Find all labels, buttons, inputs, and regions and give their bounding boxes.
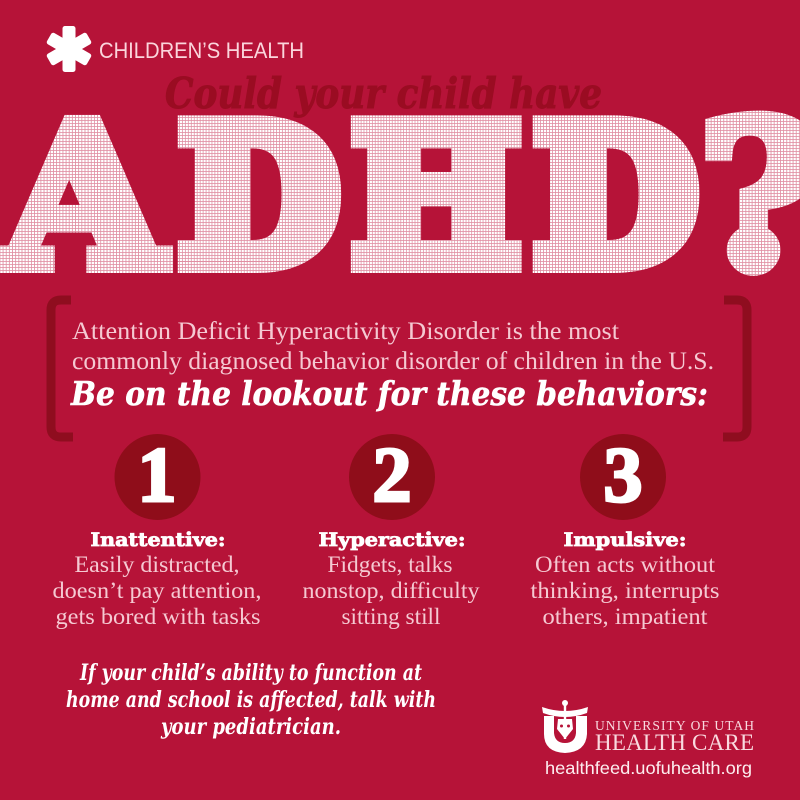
closing note: your pediatrician. bbox=[160, 714, 341, 740]
lookout heading: Be on the lookout for these behaviors: bbox=[70, 374, 708, 413]
title: ADHD? with dotted texture: A bbox=[1, 83, 165, 312]
hyperactive description: Fidgets, talks bbox=[328, 552, 452, 578]
impulsive heading: Impulsive: bbox=[564, 529, 686, 551]
wordmark: UNIVERSITY OF UTAH bbox=[595, 718, 754, 733]
impulsive description bbox=[530, 552, 720, 630]
number badge 2: 2 bbox=[372, 431, 412, 518]
number badge 3: 3 bbox=[604, 431, 642, 518]
intro text block: Attention Deficit Hyperactivity Disorder is the most bbox=[72, 318, 619, 345]
inattentive description bbox=[52, 552, 262, 630]
intro text block: commonly diagnosed behavior disorder of children in the U.S. bbox=[72, 348, 714, 375]
number badge 3 bbox=[580, 431, 666, 520]
number badge 1 bbox=[114, 431, 200, 520]
brand header: children's health bbox=[46, 26, 304, 72]
title: ADHD? with dotted texture: H bbox=[353, 87, 519, 306]
website url: healthfeed.uofuhealth.org bbox=[545, 758, 752, 778]
right bracket bbox=[723, 300, 747, 437]
hyperactive heading: Hyperactive: bbox=[318, 529, 466, 551]
number badge 1: 1 bbox=[138, 431, 176, 518]
title: ADHD? with dotted texture bbox=[1, 79, 800, 314]
panel: impulsive bbox=[530, 431, 720, 630]
header label: CHILDREN’S HEALTH bbox=[99, 38, 304, 63]
impulsive description: others, impatient bbox=[542, 604, 708, 630]
closing note: If your child’s ability to function at bbox=[79, 660, 422, 686]
title: ADHD? with dotted texture: D bbox=[535, 87, 696, 306]
subtitle: could your child have: Could your child have bbox=[165, 69, 602, 118]
hyperactive description: sitting still bbox=[342, 604, 441, 630]
title: ADHD? with dotted texture: D bbox=[180, 88, 338, 306]
hyperactive description bbox=[302, 552, 480, 630]
closing note: home and school is affected, talk with bbox=[66, 687, 436, 713]
left bracket bbox=[51, 300, 73, 437]
impulsive description: Often acts without bbox=[535, 552, 715, 578]
panel: inattentive bbox=[52, 431, 262, 630]
icon: U with caduceus bbox=[542, 700, 588, 753]
hyperactive description: nonstop, difficulty bbox=[302, 578, 480, 604]
closing note bbox=[66, 660, 436, 740]
inattentive description: Easily distracted, bbox=[74, 552, 240, 578]
impulsive description: thinking, interrupts bbox=[530, 578, 720, 604]
icon: asterisk bbox=[46, 26, 92, 72]
inattentive heading: Inattentive: bbox=[90, 529, 226, 551]
logo: university of utah health care: HEALTH CARE bbox=[595, 730, 754, 755]
logo: university of utah health care bbox=[542, 700, 754, 778]
panel: hyperactive bbox=[302, 431, 480, 630]
inattentive description: gets bored with tasks bbox=[56, 604, 260, 630]
intro text block bbox=[70, 318, 714, 413]
inattentive description: doesn’t pay attention, bbox=[52, 578, 262, 604]
number badge 2 bbox=[349, 431, 435, 520]
